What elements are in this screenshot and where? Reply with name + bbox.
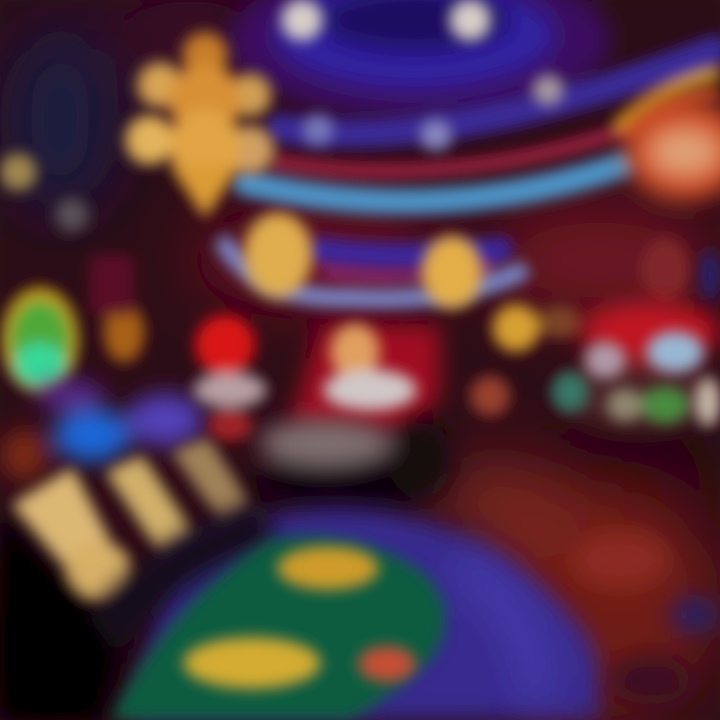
poker table — [100, 509, 600, 720]
green machine light — [2, 255, 144, 392]
dark console — [255, 420, 452, 510]
table rim highlight — [460, 560, 536, 700]
ceiling lights — [282, 0, 563, 150]
ceiling: dome — [230, 0, 610, 120]
table rim — [130, 509, 600, 720]
rainbow arc: lower — [225, 245, 520, 299]
right machines — [552, 250, 720, 431]
slot machine panels — [12, 438, 250, 602]
table felt — [110, 536, 445, 720]
blue and purple screens — [0, 381, 203, 481]
chips — [184, 547, 415, 688]
foreground: dark corner — [0, 510, 115, 720]
hanging lanterns — [0, 154, 690, 416]
rainbow arc: upper — [245, 50, 715, 202]
table edge shadow — [100, 525, 270, 640]
carpet accents — [570, 530, 719, 704]
left slot machines — [0, 255, 250, 602]
red machines center — [194, 315, 452, 510]
chandelier: gold star — [126, 33, 274, 218]
right rainbow cloud — [625, 100, 720, 200]
